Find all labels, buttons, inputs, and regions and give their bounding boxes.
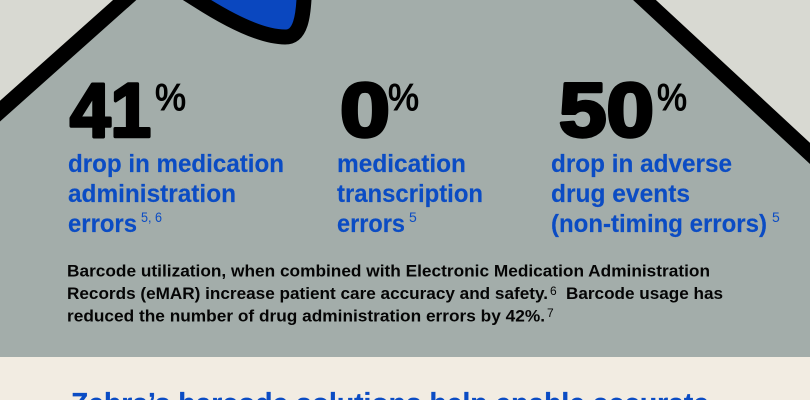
figure: 50% (559, 68, 687, 154)
text block: barcode utilization summary: Records (eMAR) increase patient care accuracy and safety. (67, 284, 548, 303)
icon: blue droplet tip (165, 0, 304, 37)
figure: 50%: 50 (559, 68, 654, 154)
text block: barcode utilization summary: 7 (547, 306, 554, 320)
caption: drop in medication administration errors (68, 150, 284, 238)
text block: barcode utilization summary: 6 (550, 284, 557, 298)
caption: medication transcription errors (337, 150, 483, 238)
text block: barcode utilization summary: Barcode utilization, when combined with Electronic Medication Administration (67, 262, 710, 280)
figure: 41%: 41 (70, 68, 151, 154)
caption: drop in adverse drug events (non-timing errors): (non-timing errors) (551, 210, 767, 238)
figure: 41%: % (155, 77, 186, 119)
caption: medication transcription errors: medication (337, 150, 466, 178)
caption: medication transcription errors: errors (337, 210, 405, 238)
figure: 0% (340, 68, 419, 154)
caption: drop in adverse drug events (non-timing errors): 5 (772, 209, 780, 225)
caption: drop in medication administration errors: drop in medication (68, 150, 284, 178)
figure: 0%: 0 (340, 68, 390, 154)
figure: 50%: % (657, 77, 687, 119)
caption: medication transcription errors: transcription (337, 180, 483, 208)
text block: barcode utilization summary: Barcode usage has (566, 284, 723, 303)
caption: drop in adverse drug events (non-timing errors): drop in adverse (551, 150, 732, 178)
caption: drop in medication administration errors: 5, 6 (141, 209, 162, 225)
stat: 41 percent (68, 68, 284, 238)
panel: cream footer band (0, 357, 810, 400)
figure: 0%: % (388, 77, 419, 119)
caption: drop in adverse drug events (non-timing errors) (551, 150, 780, 238)
text block: barcode utilization summary (67, 262, 723, 326)
caption: drop in medication administration errors: errors (68, 210, 137, 238)
text block: barcode utilization summary: reduced the number of drug administration errors by 42%. (67, 306, 545, 326)
caption: drop in medication administration errors: administration (68, 180, 236, 208)
caption: drop in adverse drug events (non-timing errors): drug events (551, 180, 690, 208)
stat: 0 percent (337, 68, 483, 238)
caption: medication transcription errors: 5 (409, 209, 417, 225)
stat: 50 percent (551, 68, 780, 238)
